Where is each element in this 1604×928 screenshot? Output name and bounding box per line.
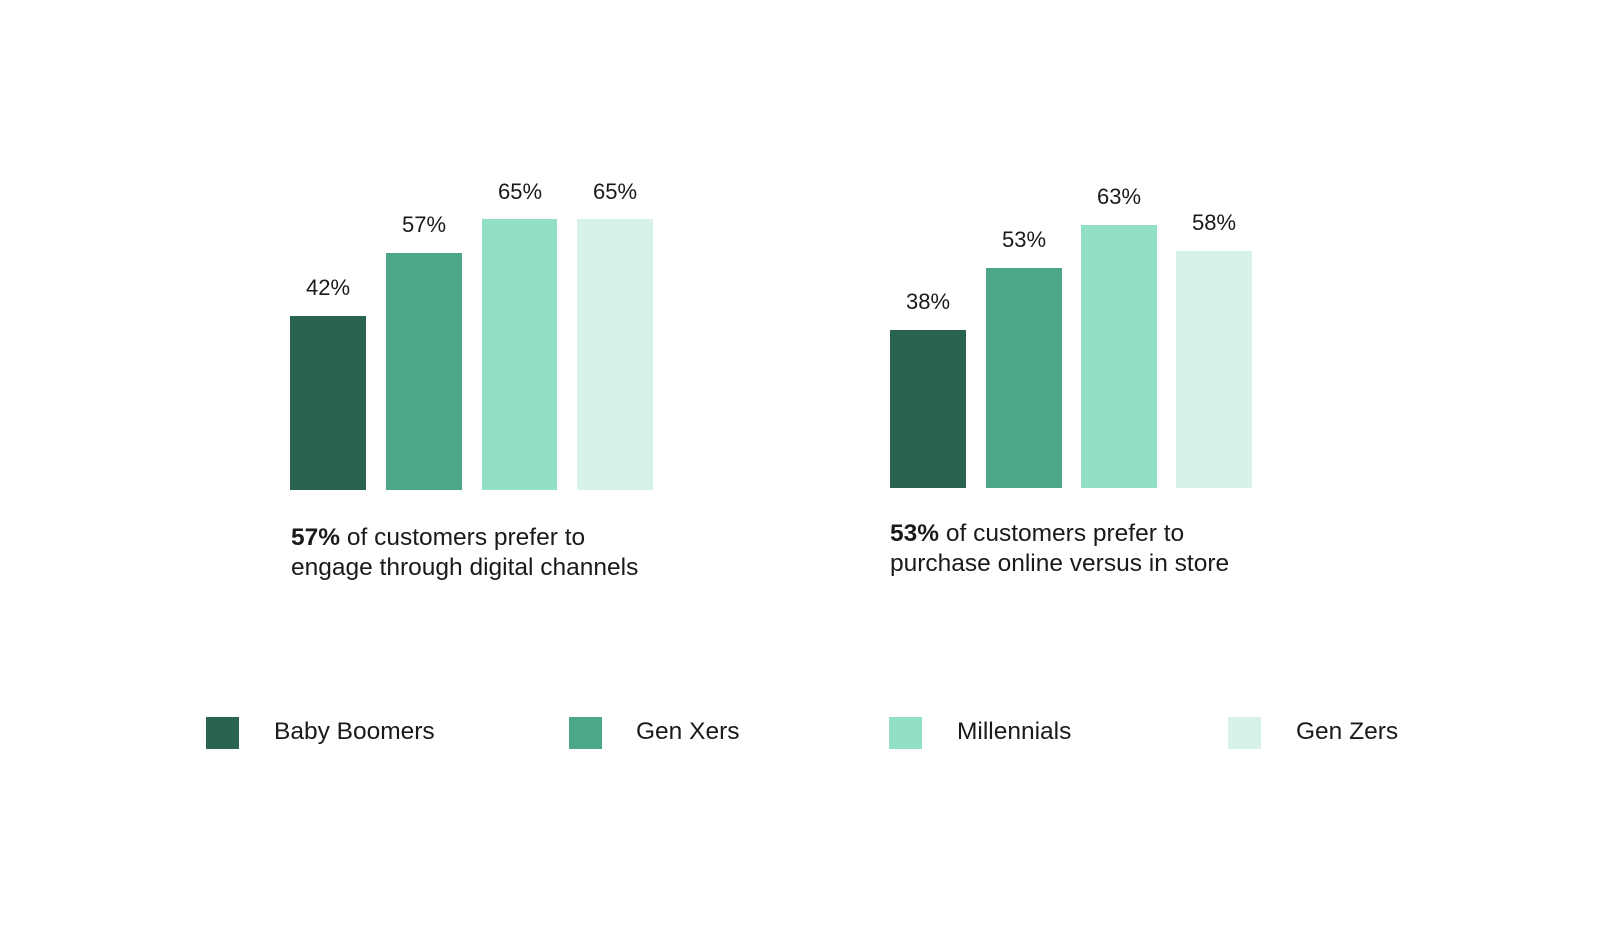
legend: gen xers [569, 717, 602, 749]
bar: millennials 63% [1081, 225, 1157, 488]
value 53%: 53% [1002, 227, 1046, 252]
value 65%: 65% [498, 179, 542, 204]
caption: 57% of customers prefer to [291, 524, 585, 551]
caption: purchase online versus in store [890, 550, 1229, 577]
bar: gen xers 53% [986, 268, 1062, 488]
legend: millennials [889, 717, 922, 749]
bar: gen xers 57% [386, 253, 462, 490]
value 57%: 57% [402, 212, 446, 237]
chart: purchase online [890, 184, 1252, 577]
caption [291, 524, 638, 581]
legend: gen zers [1228, 717, 1261, 749]
value 65%: 65% [593, 179, 637, 204]
caption [890, 520, 1229, 577]
legend: Millennials [957, 718, 1071, 745]
value 63%: 63% [1097, 184, 1141, 209]
value 38%: 38% [906, 289, 950, 314]
bar: baby boomers 42% [290, 316, 366, 490]
bar: baby boomers 38% [890, 330, 966, 488]
value 58%: 58% [1192, 210, 1236, 235]
value 42%: 42% [306, 275, 350, 300]
bar: millennials 65% [482, 219, 557, 490]
legend: baby boomers [206, 717, 239, 749]
caption: engage through digital channels [291, 554, 638, 581]
bar: gen zers 58% [1176, 251, 1252, 488]
caption: 53% of customers prefer to [890, 520, 1184, 547]
legend [206, 717, 1398, 749]
bar: gen zers 65% [577, 219, 653, 490]
legend: Baby Boomers [274, 718, 435, 745]
legend: Gen Xers [636, 718, 740, 745]
chart: digital channels [290, 179, 653, 581]
legend: Gen Zers [1296, 718, 1398, 745]
